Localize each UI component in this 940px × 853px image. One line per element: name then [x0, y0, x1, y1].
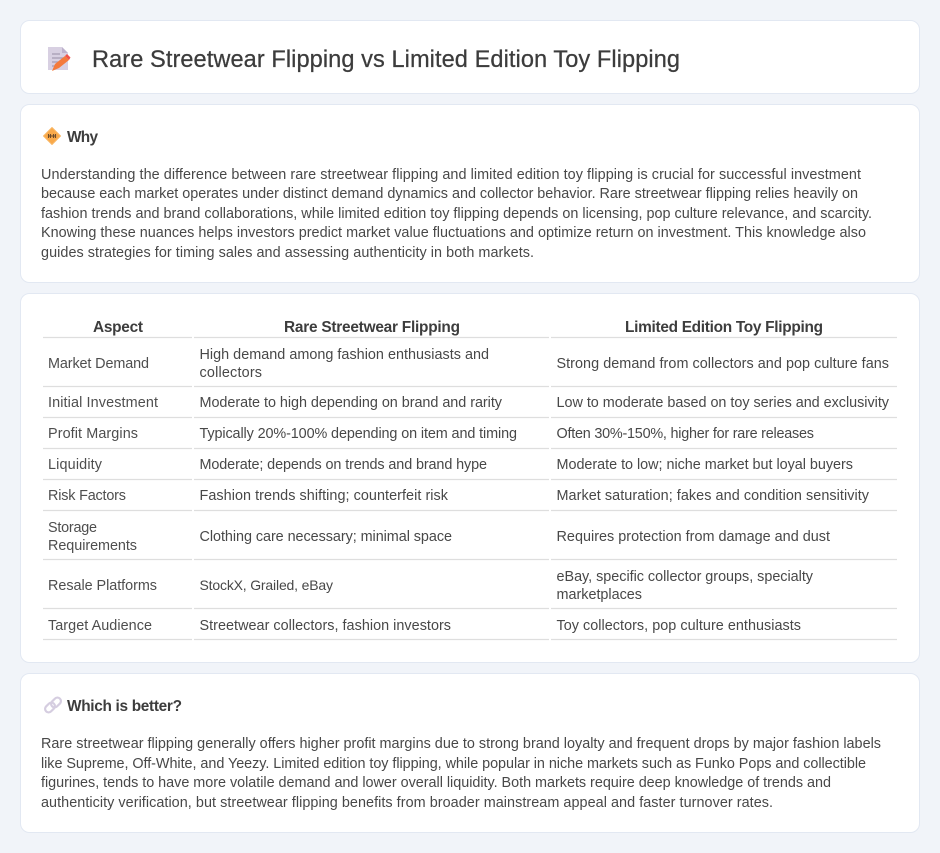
text block: why paragraph: guides strategies for timing sales and assessing authenticity in both markets. [41, 245, 534, 261]
panel: which is better [20, 674, 920, 832]
panel: comparison table [20, 294, 920, 662]
panel: why [20, 104, 920, 282]
text block: why paragraph: Knowing these nuances helps investors predict market value fluctuations and optimize return on investment. This knowledge also [41, 225, 866, 241]
row: liquidity [48, 457, 853, 473]
row: liquidity: Liquidity [48, 457, 103, 473]
title: Rare Streetwear Flipping vs Limited Edition Toy Flipping [92, 47, 680, 73]
row: resale platforms: eBay, specific collector groups, specialty [556, 569, 814, 585]
row: resale platforms: StockX, Grailed, eBay [200, 577, 333, 593]
row: liquidity: Moderate; depends on trends and brand hype [200, 457, 487, 473]
row: storage requirements: Clothing care necessary; minimal space [200, 529, 452, 545]
row: risk factors: Fashion trends shifting; counterfeit risk [200, 488, 449, 504]
table header row: Rare Streetwear Flipping [284, 319, 460, 336]
icon: memo with pencil [48, 47, 70, 71]
row: profit margins: Often 30%-150%, higher for rare releases [556, 426, 814, 442]
text block: which is better paragraph: Rare streetwear flipping generally offers higher profit margins due to strong brand loyalty and frequent drops by major fashion labels [41, 736, 881, 752]
icon: link [44, 696, 62, 714]
panel: title header [20, 20, 920, 94]
row: risk factors: Risk Factors [48, 488, 126, 504]
row: resale platforms: marketplaces [556, 587, 642, 603]
row: initial investment: Initial Investment [48, 395, 158, 411]
row: storage requirements: Requirements [48, 538, 137, 554]
row: risk factors: Market saturation; fakes and condition sensitivity [556, 488, 870, 504]
row: market demand: Market Demand [48, 356, 149, 372]
row: profit margins: Typically 20%-100% depending on item and timing [200, 426, 517, 442]
row: storage requirements: Storage [48, 520, 97, 536]
row: resale platforms: Resale Platforms [48, 578, 157, 594]
row: initial investment: Moderate to high depending on brand and rarity [200, 395, 503, 411]
text block: which is better paragraph: figurines, tends to have more volatile demand and lower overall liquidity. Both markets require deep knowledge of trends and [41, 775, 831, 791]
row: storage requirements [48, 520, 830, 554]
table header row: Aspect [93, 319, 143, 336]
row: risk factors [48, 488, 870, 504]
table header row [93, 319, 823, 336]
icon: diamond sign [44, 128, 60, 144]
text block: why paragraph: Understanding the difference between rare streetwear flipping and limited edition toy flipping is crucial for successful investment [41, 167, 861, 183]
row: target audience [48, 618, 801, 634]
heading: which is better: Which is better? [67, 698, 182, 715]
text block: which is better paragraph: like Supreme, Off-White, and Yeezy. Limited edition toy flipping, while popular in niche markets such as Funko Pops and collectible [41, 756, 866, 772]
row: initial investment [48, 395, 890, 411]
row: profit margins: Profit Margins [48, 426, 138, 442]
row: market demand [48, 347, 889, 381]
text block: why paragraph [41, 167, 872, 261]
row: resale platforms [48, 569, 814, 603]
row: liquidity: Moderate to low; niche market but loyal buyers [556, 457, 853, 473]
row: target audience: Toy collectors, pop culture enthusiasts [556, 618, 801, 634]
text block: why paragraph: because each market operates under distinct demand dynamics and collector behavior. Rare streetwear flipping relies heavily on [41, 186, 858, 202]
text block: which is better paragraph [41, 736, 881, 811]
heading: why: Why [67, 129, 98, 146]
table header row: Limited Edition Toy Flipping [625, 319, 823, 336]
row: market demand: Strong demand from collectors and pop culture fans [556, 356, 889, 372]
text block: why paragraph: fashion trends and brand collaborations, while limited edition toy flipping depends on licensing, pop culture relevance, and scarcity. [41, 206, 872, 222]
row: target audience: Target Audience [48, 618, 152, 634]
row: initial investment: Low to moderate based on toy series and exclusivity [556, 395, 890, 411]
row: market demand: High demand among fashion enthusiasts and [200, 347, 489, 363]
text block: which is better paragraph: authenticity verification, but streetwear flipping benefits from broader mainstream appeal and faster turnover rates. [41, 795, 773, 811]
row: market demand: collectors [200, 365, 262, 381]
row: profit margins [48, 426, 814, 442]
row: storage requirements: Requires protection from damage and dust [556, 529, 830, 545]
row: target audience: Streetwear collectors, fashion investors [200, 618, 451, 634]
